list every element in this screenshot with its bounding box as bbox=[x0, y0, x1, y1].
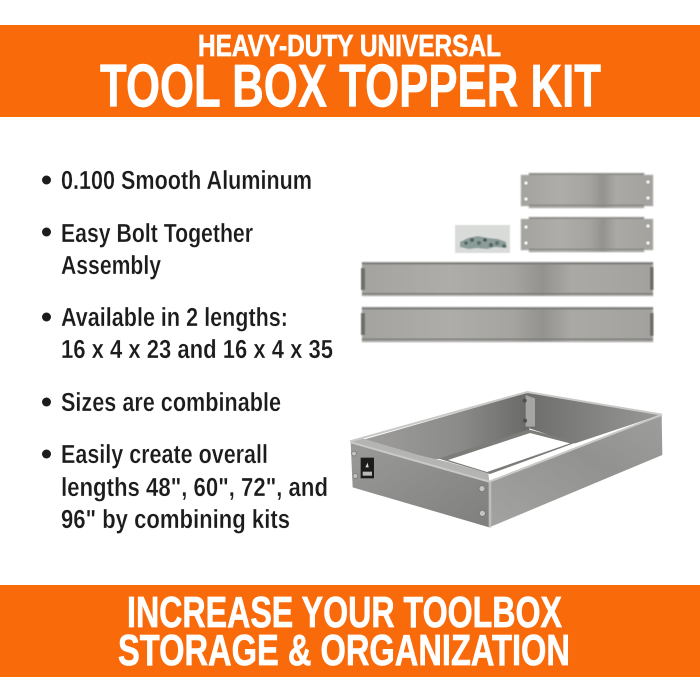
bullet: lengths: 16 x 4 x 23 and 16 x 4 x 35 bbox=[61, 336, 333, 364]
corner bracket bbox=[526, 395, 535, 427]
bullet: aluminum: 0.100 Smooth Aluminum bbox=[61, 167, 312, 195]
bullet: overall lengths bbox=[42, 441, 328, 534]
bullet: overall lengths: lengths 48", 60", 72", and bbox=[61, 474, 328, 502]
bullet: assembly: Easy Bolt Together bbox=[61, 220, 253, 248]
kit parts photo bbox=[361, 173, 654, 342]
front wall bbox=[351, 443, 489, 527]
bullet: assembly bbox=[42, 220, 253, 280]
header banner bbox=[0, 25, 700, 120]
inner back left wall bbox=[353, 393, 529, 460]
rim highlights bbox=[350, 392, 662, 482]
bullet: lengths: Available in 2 lengths: bbox=[61, 304, 288, 332]
bullet: assembly: Assembly bbox=[61, 252, 162, 280]
long panel 1 bbox=[361, 262, 654, 296]
feature list bbox=[42, 167, 333, 534]
footer banner bbox=[0, 585, 700, 677]
bullet: overall lengths: Easily create overall bbox=[61, 441, 268, 469]
inner back right wall bbox=[527, 393, 660, 443]
right side wall bbox=[489, 415, 662, 527]
short panel 2 bbox=[521, 217, 653, 252]
short panel 1 bbox=[521, 173, 653, 208]
bolts bbox=[352, 451, 485, 516]
assembled topper box bbox=[350, 392, 662, 527]
bullet: combinable: Sizes are combinable bbox=[61, 389, 281, 417]
bullet: overall lengths: 96" by combining kits bbox=[61, 506, 290, 534]
opening lip bbox=[439, 429, 577, 474]
hardware bag bbox=[455, 225, 510, 253]
long panel 2 bbox=[361, 307, 654, 342]
header small title: HEAVY-DUTY UNIVERSAL bbox=[198, 28, 501, 63]
label plate bbox=[361, 458, 374, 478]
box opening bbox=[448, 433, 570, 472]
bullet: lengths bbox=[42, 304, 333, 364]
front rim top surface bbox=[351, 439, 489, 482]
